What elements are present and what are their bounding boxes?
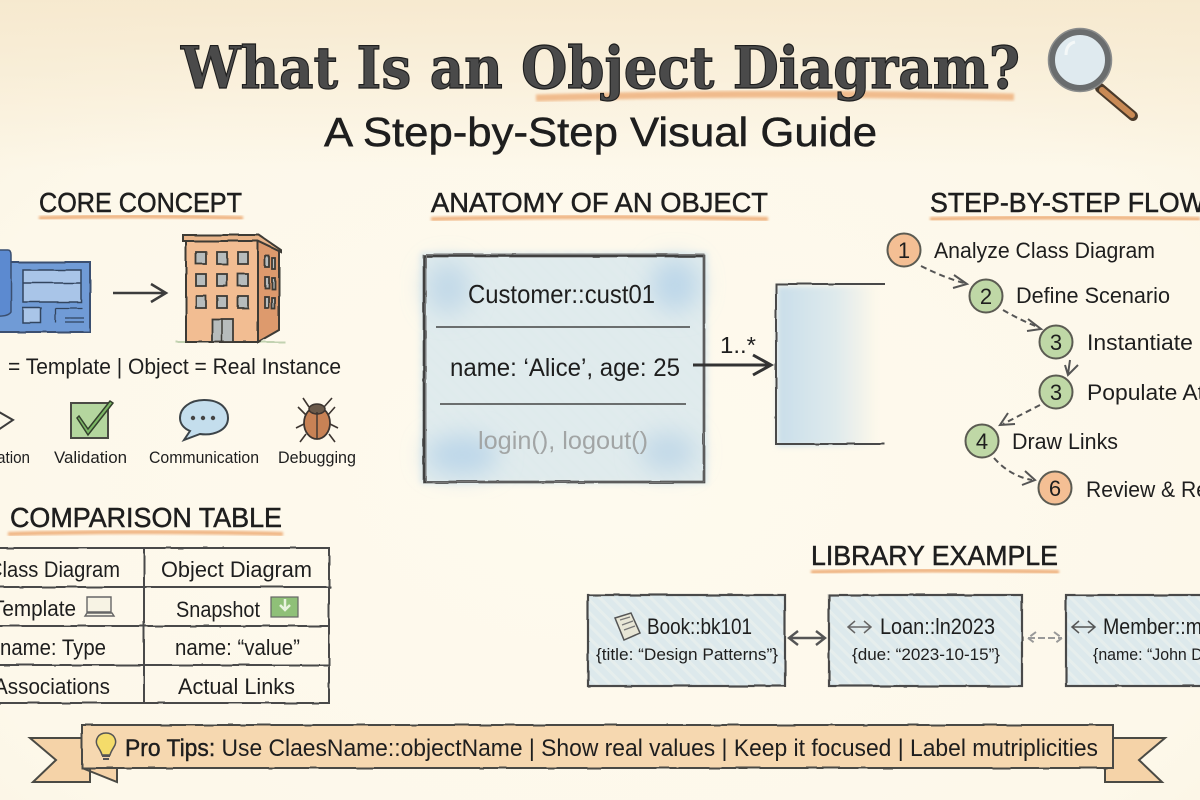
step 4: Draw Links <box>1012 429 1118 454</box>
tips text: Pro Tips: Use ClaesName::objectName | Show real values | Keep it focused | Label mutriplicities <box>125 735 1098 762</box>
use case: validation: Validation <box>54 448 127 467</box>
heading: core concept: CORE CONCEPT <box>39 187 242 218</box>
step 6: 6 <box>1049 476 1061 501</box>
arrow: class to object <box>113 284 166 302</box>
banner right tail <box>1105 738 1165 782</box>
banner left tail <box>30 738 117 782</box>
icon: book <box>615 613 640 640</box>
icon: light bulb <box>96 733 116 759</box>
table row: template vs snapshot: Snapshot <box>176 597 260 622</box>
table row: template vs snapshot <box>0 596 298 622</box>
step 4 <box>966 424 1118 458</box>
arrow 4 to 6 <box>994 458 1035 485</box>
panel: step-by-step flow <box>888 187 1200 504</box>
use case: debugging <box>278 398 356 467</box>
arrow: multiplicity link <box>693 332 771 375</box>
panel: anatomy of an object <box>420 187 885 484</box>
table grid <box>0 548 331 703</box>
arrow: multiplicity link: 1..* <box>720 332 756 358</box>
object attributes: name: ‘Alice’, age: 25 <box>450 354 680 382</box>
step 4: 4 <box>976 429 988 454</box>
step 2: Define Scenario <box>1016 283 1170 308</box>
step 3 instantiate <box>1040 326 1200 358</box>
heading: library example: LIBRARY EXAMPLE <box>811 540 1058 571</box>
panel: library example <box>588 540 1200 686</box>
panel: comparison table <box>0 502 331 703</box>
panel: core concept <box>0 187 356 467</box>
subtitle: A Step-by-Step Visual Guide <box>324 109 877 155</box>
title text: What Is an Object Diagram? <box>180 34 1020 102</box>
linked object box <box>776 284 885 446</box>
use case: visualization <box>0 408 30 467</box>
step 1: Analyze Class Diagram <box>934 238 1155 263</box>
object: book: Book::bk101 <box>647 614 752 639</box>
object: loan: {due: “2023-10-15”} <box>852 645 1000 664</box>
step 2 <box>970 280 1170 312</box>
icon: member arrow <box>1072 621 1095 633</box>
title underline <box>536 94 1014 98</box>
arrow 2 to 3 <box>1003 310 1041 331</box>
table row: attributes: name: Type <box>0 635 106 660</box>
step 1: 1 <box>898 238 910 263</box>
heading: comparison table: COMPARISON TABLE <box>10 502 282 533</box>
object: member <box>1066 595 1200 686</box>
title <box>180 34 1020 102</box>
object box: Customer::cust01 <box>420 252 708 484</box>
banner body <box>82 725 1113 768</box>
table row: attributes <box>0 635 300 660</box>
step 3 instantiate: 3 <box>1050 330 1062 355</box>
arrow: book to loan <box>789 631 825 645</box>
use case: debugging: Debugging <box>278 448 356 467</box>
step 2: 2 <box>980 284 992 309</box>
use case: communication <box>149 400 259 467</box>
object: loan <box>829 595 1022 686</box>
arrow: loan to member <box>1028 632 1062 644</box>
step 3 populate <box>1040 376 1200 408</box>
icon: magnifying glass <box>1048 28 1133 116</box>
icon: blueprint <box>0 250 90 332</box>
heading: anatomy: ANATOMY OF AN OBJECT <box>431 187 768 218</box>
table row: attributes: name: “value” <box>175 635 300 660</box>
use case: communication: Communication <box>149 448 259 467</box>
arrow 3 to 3 <box>1065 360 1078 375</box>
arrow 1 to 2 <box>921 266 967 288</box>
table header row: Object Diagram <box>161 557 312 582</box>
caption: class vs object: = Template | Object = Real Instance <box>8 354 341 379</box>
banner: pro tips <box>30 725 1165 782</box>
step 1 <box>888 234 1155 266</box>
object: book <box>588 595 785 686</box>
step 3 populate: 3 <box>1050 380 1062 405</box>
object: loan: Loan::ln2023 <box>880 614 995 639</box>
object name: Customer::cust01 <box>468 279 655 309</box>
step 6 <box>1038 472 1200 504</box>
arrow 3 to 4 <box>1000 405 1040 425</box>
icon: building <box>176 235 285 342</box>
object methods: login(), logout() <box>478 427 648 455</box>
icon: loan arrow <box>848 621 871 633</box>
icon row: use cases <box>0 398 356 467</box>
use case: validation <box>54 401 127 467</box>
table header row <box>0 557 312 582</box>
object: book: {title: “Design Patterns”} <box>596 645 778 664</box>
table row: links: Actual Links <box>178 674 295 699</box>
table row: links <box>0 674 295 699</box>
